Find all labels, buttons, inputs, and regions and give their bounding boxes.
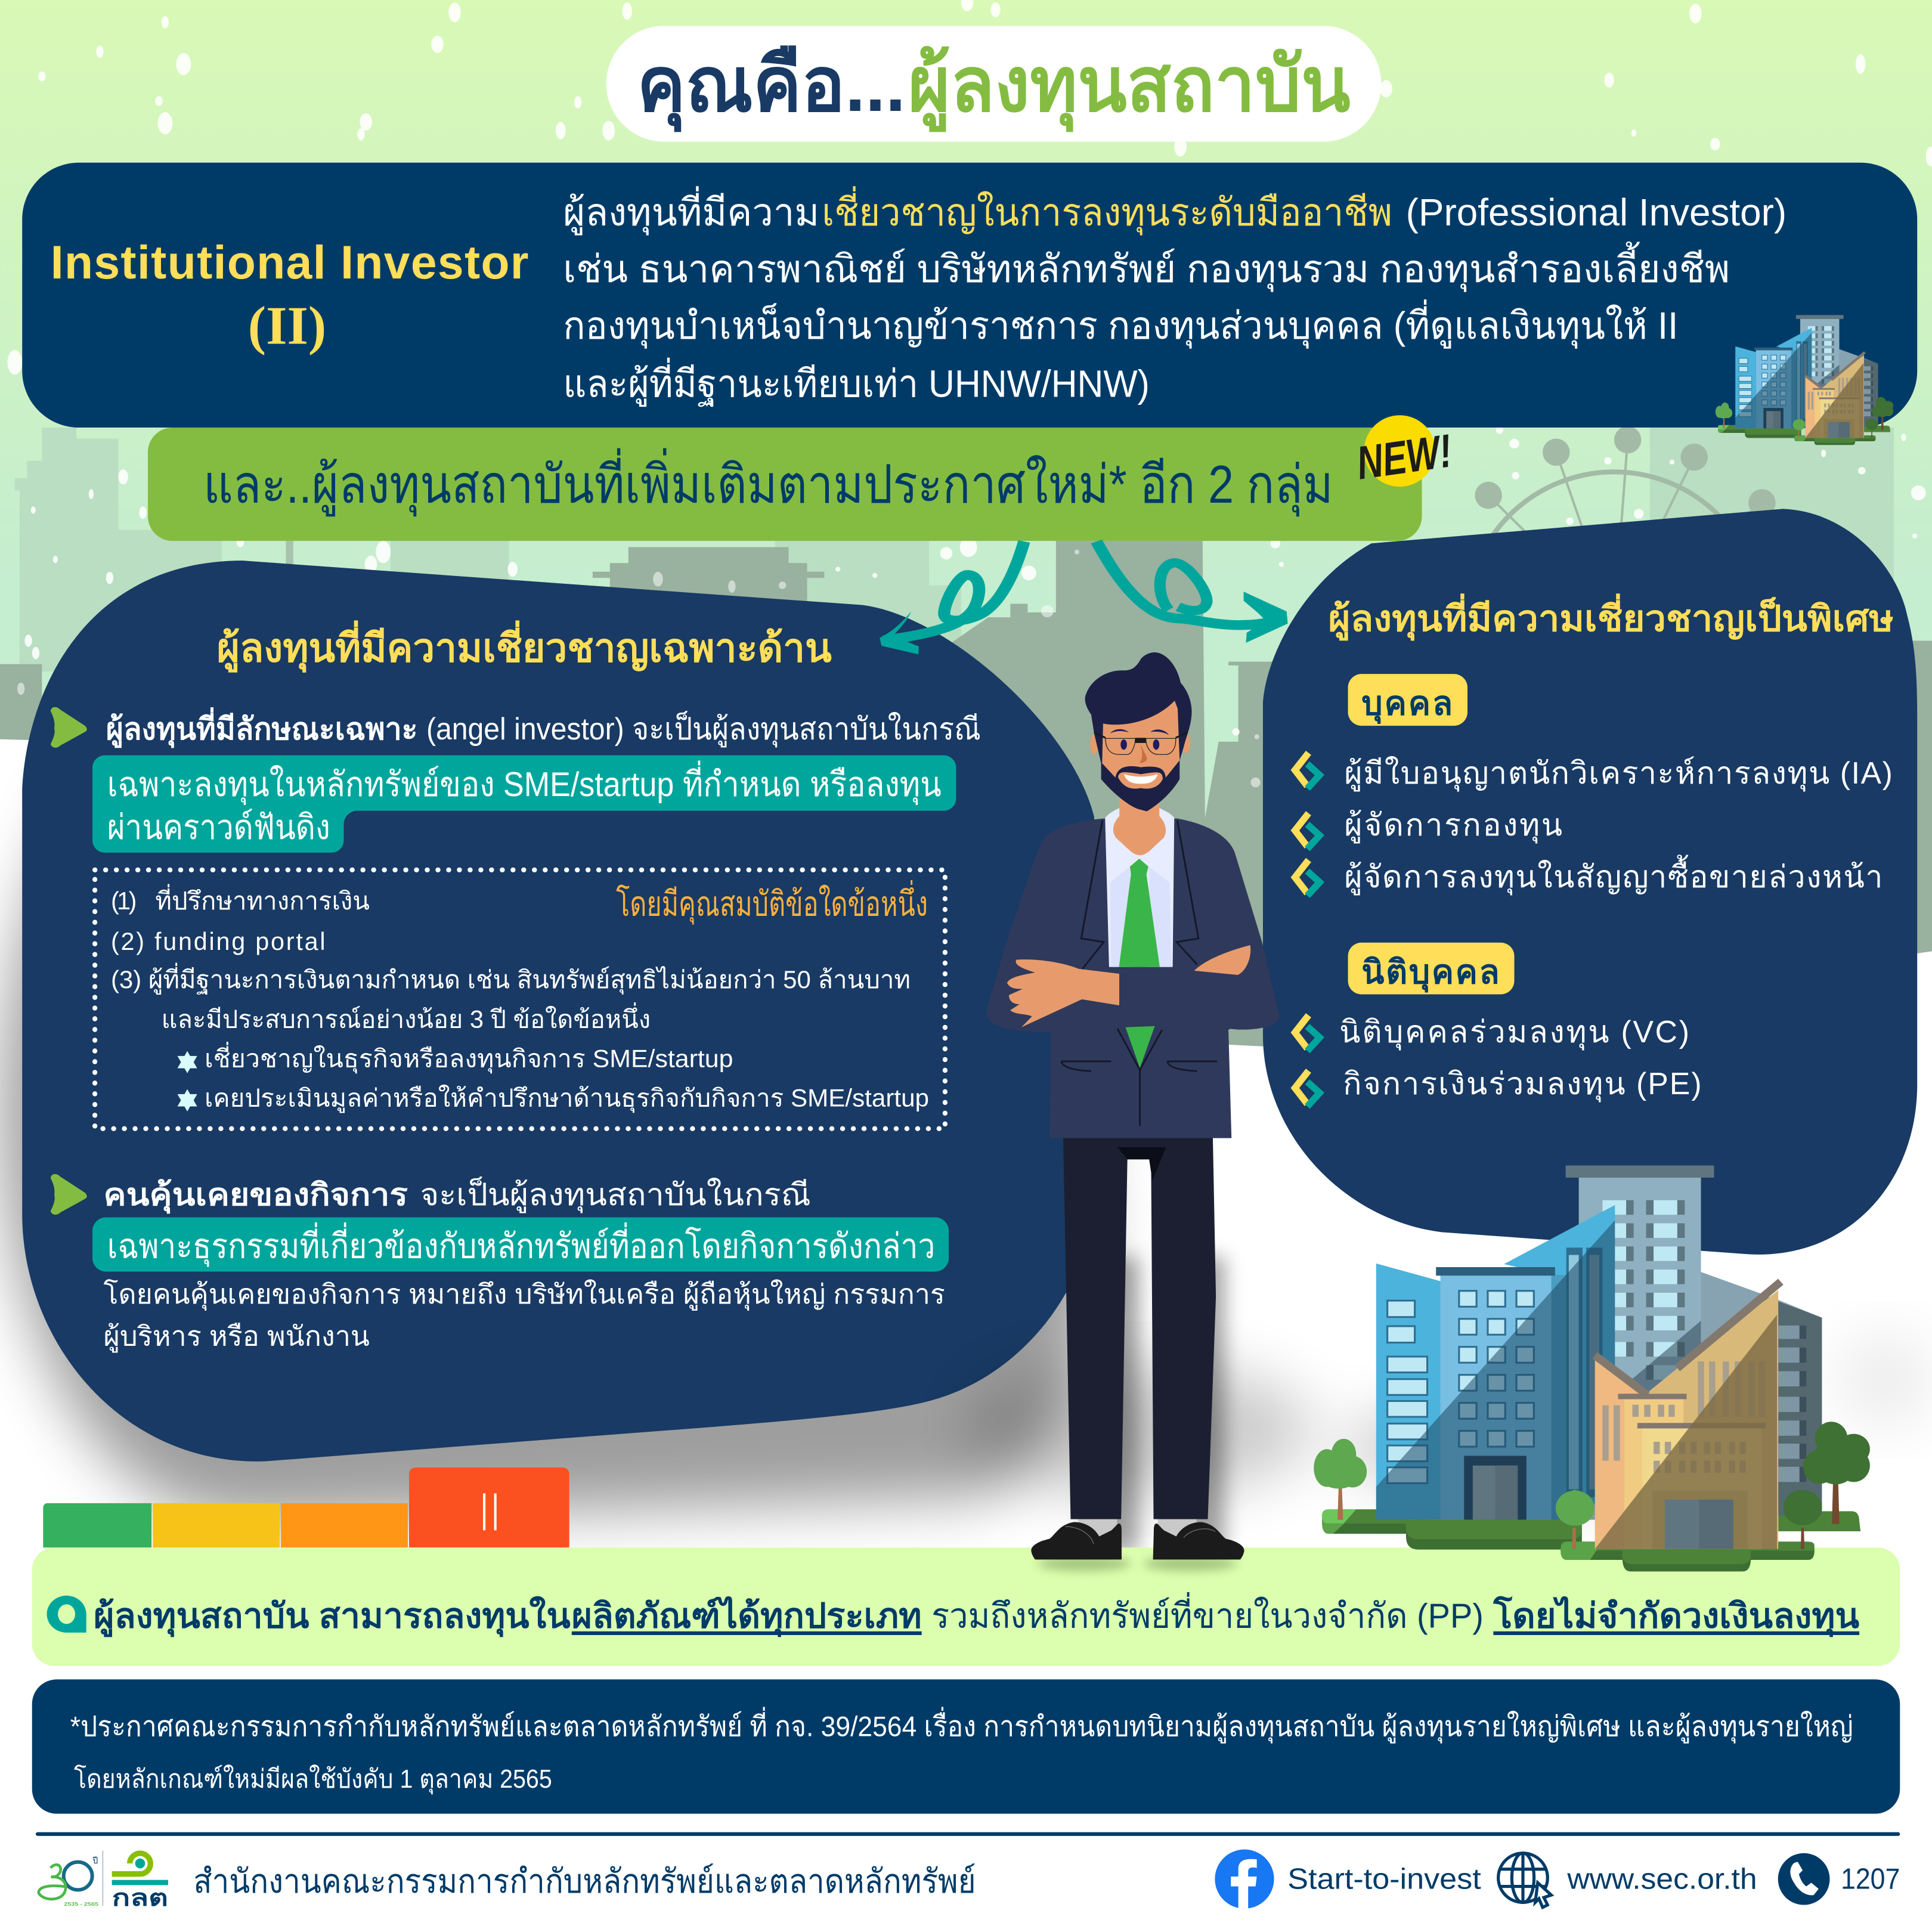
insider note: โดยคนคุ้นเคยของกิจการ หมายถึง บริษัทในเครือ ผู้ถือหุ้นใหญ่ กรรมการ	[104, 1278, 945, 1311]
website label: www.sec.or.th	[1566, 1862, 1757, 1896]
shoes	[1031, 1519, 1244, 1559]
panel: institutional investor definition	[22, 163, 1917, 428]
key message text: ผู้ลงทุนสถาบัน สามารถลงทุนใน	[94, 1596, 571, 1638]
ferris wheel	[1466, 426, 1776, 767]
logo label: years: 2535 - 2565	[64, 1901, 98, 1907]
highlight: angel investor scope: เฉพาะลงทุนในหลักทรัพย์ของ SME/startup ที่กำหนด หรือลงทุน	[107, 760, 942, 806]
insider note	[104, 1278, 945, 1352]
city buildings	[1314, 1166, 1870, 1571]
face	[1102, 701, 1179, 778]
legs	[1063, 1135, 1216, 1519]
key message text: โดยไม่จำกัดวงเงินลงทุน	[1493, 1596, 1860, 1638]
angel investor intro: ผู้ลงทุนที่มีลักษณะเฉพาะ	[106, 707, 417, 748]
hotline label: 1207	[1841, 1862, 1900, 1896]
heading: II: (II)	[248, 296, 326, 356]
icon: green chevron	[51, 707, 87, 748]
lapels and pockets	[1061, 821, 1217, 1126]
qualification list: (1)	[111, 887, 137, 915]
ears	[1090, 733, 1190, 754]
highlight: angel investor scope: ผ่านคราวด์ฟันดิง	[107, 809, 330, 847]
footnote text: โดยหลักเกณฑ์ใหม่มีผลใช้บังคับ 1 ตุลาคม 2565	[74, 1764, 552, 1795]
icon: facebook	[1215, 1850, 1274, 1909]
icon: phone	[1778, 1853, 1829, 1905]
key message text: รวมถึงหลักทรัพย์ที่ขายในวงจำกัด (PP)	[931, 1592, 1484, 1636]
NEW badge: NEW!	[1354, 424, 1455, 490]
highlight: angel investor scope	[92, 756, 956, 853]
key message text	[94, 1592, 1860, 1638]
front door	[1464, 1456, 1527, 1520]
list: individual: ผู้จัดการลงทุนในสัญญาซื้อขายล่วงหน้า	[1344, 854, 1883, 896]
icon: green chevron 2	[51, 1174, 87, 1215]
definition text: เช่น ธนาคารพาณิชย์ บริษัทหลักทรัพย์ กองทุนรวม กองทุนสำรองเลี้ยงชีพ	[563, 242, 1730, 292]
definition text: และผู้ที่มีฐานะเทียบเท่า UHNW/HNW)	[563, 357, 1150, 407]
definition text: (Professional Investor)	[1406, 191, 1787, 234]
snow dots	[7, 0, 1932, 787]
icon: chevron bullets individual	[1295, 753, 1320, 896]
small city buildings icon	[1716, 315, 1893, 445]
insider note: ผู้บริหาร หรือ พนักงาน	[104, 1321, 370, 1352]
logo mark: pi: ปี	[92, 1856, 98, 1865]
footnote text	[70, 1707, 1853, 1795]
title text: คุณคือ...	[637, 42, 906, 132]
icon: chevron bullets juristic	[1295, 1015, 1320, 1107]
glasses	[1094, 732, 1188, 754]
bar label II	[483, 1493, 497, 1530]
heading: special expertise: ผู้ลงทุนที่มีความเชี่ยวชาญเป็นพิเศษ	[1328, 593, 1894, 641]
tie	[1119, 859, 1160, 967]
definition text	[563, 186, 1787, 407]
qualification list: (3) ผู้ที่มีฐานะการเงินตามกำหนด เช่น สินทรัพย์สุทธิไม่น้อยกว่า 50 ล้านบาท	[111, 962, 911, 995]
insider intro	[104, 1176, 811, 1214]
insider intro: คนคุ้นเคยของกิจการ	[104, 1177, 408, 1214]
title text	[637, 42, 1351, 132]
head and shirt	[1085, 652, 1192, 967]
man illustration	[986, 652, 1280, 1559]
nose	[1140, 744, 1147, 763]
title pill	[606, 26, 1381, 142]
dotted qualification box	[95, 870, 945, 1129]
arrow: to right panel	[1097, 541, 1288, 643]
qualification note: โดยมีคุณสมบัติข้อใดข้อหนึ่ง	[616, 880, 928, 925]
blue angular tower	[1504, 1205, 1615, 1520]
definition text: เชี่ยวชาญในการลงทุนระดับมืออาชีพ	[822, 186, 1392, 236]
eyes and brows	[1110, 729, 1169, 750]
title text: ผู้ลงทุนสถาบัน	[908, 42, 1351, 132]
tan building	[1595, 1281, 1781, 1549]
insider intro: จะเป็นผู้ลงทุนสถาบันในกรณี	[420, 1176, 811, 1213]
logo: SEC wordmark: กลต	[112, 1885, 168, 1911]
icon: teal ring	[47, 1596, 86, 1633]
badge: individual: บุคคล	[1361, 684, 1453, 724]
qualification list	[111, 884, 929, 1113]
logo: SEC mark	[112, 1853, 168, 1885]
shoe shadows	[1038, 1556, 1237, 1571]
icon: star bullets	[178, 1051, 197, 1111]
shirt	[1105, 808, 1174, 967]
logo: 30 years	[39, 1862, 92, 1899]
lower tie	[1125, 1026, 1155, 1068]
panel: right blob	[1263, 509, 1917, 1255]
highlight: insider scope: เฉพาะธุรกรรมที่เกี่ยวข้องกับหลักทรัพย์ที่ออกโดยกิจการดังกล่าว	[107, 1222, 935, 1268]
list: juristic person: กิจการเงินร่วมลงทุน (PE)	[1343, 1066, 1702, 1103]
qualification list: ที่ปรึกษาทางการเงิน	[155, 884, 370, 915]
bar chart: risk tiers	[43, 1467, 569, 1547]
icon: globe with cursor	[1498, 1853, 1552, 1908]
badge: individual	[1348, 674, 1467, 726]
back tower	[1566, 1166, 1714, 1436]
angel investor intro	[106, 707, 981, 748]
jacket	[986, 819, 1280, 1138]
trees	[1314, 1422, 1870, 1549]
footer organization name: สำนักงานคณะกรรมการกำกับหลักทรัพย์และตลาดหลักทรัพย์	[193, 1862, 976, 1900]
definition text: ผู้ลงทุนที่มีความ	[563, 186, 819, 236]
panel: green new-groups banner	[148, 428, 1422, 541]
footnote text: *ประกาศคณะกรรมการกำกับหลักทรัพย์และตลาดหลักทรัพย์ ที่ กจ. 39/2564 เรื่อง การกำหนดบทนิยามผู้ลงทุนสถาบัน ผู้ลงทุนรายใหญ่พิเศษ และผู้ลงทุนรายใหญ่	[70, 1707, 1853, 1744]
banner text: และ..ผู้ลงทุนสถาบันที่เพิ่มเติมตามประกาศใหม่* อีก 2 กลุ่ม	[203, 448, 1333, 517]
qualification list: (2) funding portal	[111, 928, 326, 955]
neck	[1113, 799, 1166, 855]
list: individual	[1344, 756, 1893, 896]
qualification list: และมีประสบการณ์อย่างน้อย 3 ปี ข้อใดข้อหนึ่ง	[162, 1002, 651, 1033]
panel: left blob	[22, 561, 1094, 1462]
crossed arms	[1119, 969, 1272, 1030]
definition text: กองทุนบำเหน็จบำนาญข้าราชการ กองทุนส่วนบุคคล (ที่ดูแลเงินทุนให้ II	[563, 299, 1678, 349]
list: individual: ผู้มีใบอนุญาตนักวิเคราะห์การลงทุน (IA)	[1344, 756, 1893, 792]
list: juristic person	[1339, 1014, 1702, 1103]
blue front building	[1376, 1264, 1566, 1520]
hair and beard	[1085, 652, 1192, 812]
right grey building	[1701, 1272, 1822, 1515]
footer logos	[39, 1850, 168, 1911]
key message text: ผลิตภัณฑ์ได้ทุกประเภท	[572, 1596, 922, 1638]
panel: footnote	[32, 1679, 1900, 1814]
angel investor intro: (angel investor) จะเป็นผู้ลงทุนสถาบันในกรณี	[426, 711, 981, 748]
qualification list: เคยประเมินมูลค่าหรือให้คำปรึกษาด้านธุรกิจกับกิจการ SME/startup	[205, 1084, 929, 1113]
soft shadows of man and buildings	[967, 1257, 1932, 1553]
heading: Institutional Investor: Institutional Investor	[51, 236, 528, 289]
badge: juristic person	[1348, 943, 1515, 995]
panel: key message	[32, 1547, 1900, 1666]
mouth	[1118, 772, 1163, 789]
diagonal shade	[1376, 1220, 1615, 1520]
qualification list: เชี่ยวชาญในธุรกิจหรือลงทุนกิจการ SME/startup	[205, 1041, 733, 1073]
highlight: insider scope	[92, 1218, 949, 1271]
heading: specialist in specific field: ผู้ลงทุนที่มีความเชี่ยวชาญเฉพาะด้าน	[217, 620, 832, 673]
list: juristic person: นิติบุคคลร่วมลงทุน (VC)	[1339, 1014, 1689, 1051]
facebook label: Start-to-invest	[1287, 1862, 1481, 1896]
arrow: to left panel	[880, 541, 1024, 654]
badge: juristic person: นิติบุคคล	[1361, 953, 1500, 993]
shadows under blobs	[0, 616, 1097, 1522]
ground	[1322, 1509, 1860, 1571]
list: individual: ผู้จัดการกองทุน	[1344, 807, 1562, 844]
